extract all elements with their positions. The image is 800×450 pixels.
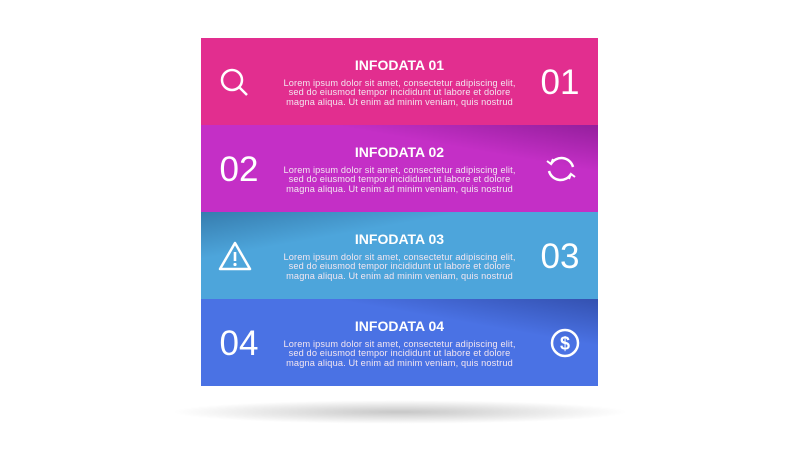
panel: infodata 02 <box>201 125 598 212</box>
icon: dollar <box>550 328 580 358</box>
text block <box>283 252 516 281</box>
text block: Lorem ipsum dolor sit amet, consectetur adipiscing elit, <box>283 339 516 349</box>
text block: magna aliqua. Ut enim ad minim veniam, quis nostrud <box>286 358 513 368</box>
heading: INFODATA 04 <box>355 318 444 334</box>
heading: INFODATA 03 <box>355 231 444 247</box>
panel: infodata 01 <box>201 38 598 125</box>
text block <box>283 165 516 194</box>
text block: Lorem ipsum dolor sit amet, consectetur adipiscing elit, <box>283 252 516 262</box>
text block: sed do eiusmod tempor incididunt ut labore et dolore <box>289 348 510 358</box>
text block <box>283 339 516 368</box>
text block: sed do eiusmod tempor incididunt ut labore et dolore <box>289 174 510 184</box>
text block: Lorem ipsum dolor sit amet, consectetur adipiscing elit, <box>283 165 516 175</box>
icon: warning <box>218 242 252 270</box>
icon: dollar: $ <box>560 334 570 354</box>
text block: Lorem ipsum dolor sit amet, consectetur adipiscing elit, <box>283 78 516 88</box>
panel: infodata 03 <box>201 212 598 299</box>
heading: INFODATA 02 <box>355 144 444 160</box>
icon: refresh <box>546 156 576 182</box>
number: 02 <box>220 150 258 189</box>
number: 01 <box>541 63 579 102</box>
number: 04 <box>220 324 258 363</box>
text block: magna aliqua. Ut enim ad minim veniam, quis nostrud <box>286 184 513 194</box>
text block: magna aliqua. Ut enim ad minim veniam, quis nostrud <box>286 97 513 107</box>
text block: sed do eiusmod tempor incididunt ut labore et dolore <box>289 261 510 271</box>
icon: search <box>220 68 248 96</box>
shadow <box>170 400 630 424</box>
text block: magna aliqua. Ut enim ad minim veniam, quis nostrud <box>286 271 513 281</box>
text block: sed do eiusmod tempor incididunt ut labore et dolore <box>289 87 510 97</box>
panel: infodata 04 <box>201 299 598 386</box>
number: 03 <box>541 237 579 276</box>
heading: INFODATA 01 <box>355 57 444 73</box>
text block <box>283 78 516 107</box>
